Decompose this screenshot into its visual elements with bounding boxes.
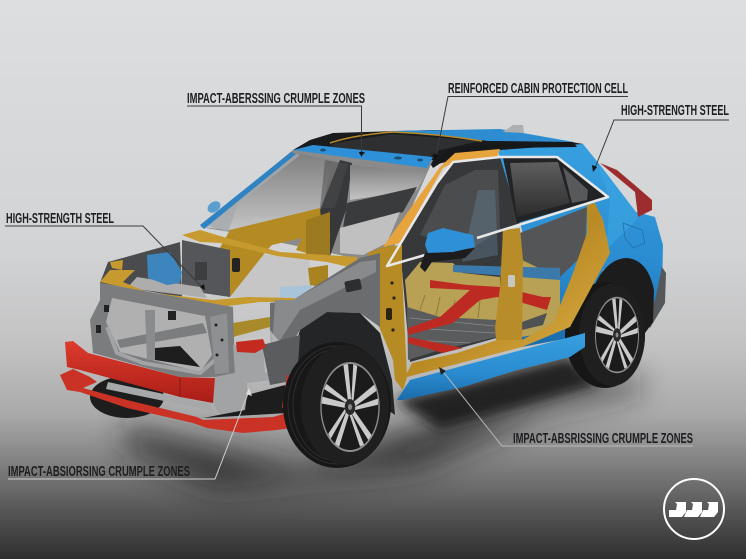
label: impact crumple zones bottom left xyxy=(8,388,252,480)
A pillar xyxy=(383,149,500,247)
front hinge pillar xyxy=(367,245,407,390)
panel: wheel arch structure xyxy=(270,253,395,415)
label: reinforced cabin: REINFORCED CABIN PROTECTION CELL xyxy=(448,81,628,97)
floor tan xyxy=(405,262,500,337)
window trim xyxy=(387,157,608,266)
label: impact crumple zones bottom right xyxy=(439,367,693,447)
red floor beams xyxy=(408,280,551,353)
panel: gold front beams xyxy=(100,230,358,307)
panel: front cabin opening xyxy=(385,157,520,362)
label: high-strength steel right xyxy=(592,103,729,172)
B pillar xyxy=(495,228,523,350)
panel: gold pillars and sill xyxy=(367,149,610,390)
label: impact crumple zones bottom left: IMPACT-ABSIORSING CRUMPLE ZONES xyxy=(8,464,190,480)
sill and rear pillar xyxy=(405,203,610,377)
panel: blue side sill xyxy=(397,333,585,400)
panel: red front crash beams xyxy=(60,341,305,433)
washer tank xyxy=(147,252,182,285)
blue A-pillar strip xyxy=(200,152,296,229)
floor grey xyxy=(407,307,497,360)
rear bumper xyxy=(646,267,666,328)
label: reinforced cabin xyxy=(433,81,628,160)
light view behind the firewall xyxy=(225,255,310,298)
panel: radiator support xyxy=(90,283,235,377)
ground shadow xyxy=(125,355,640,490)
logo badge xyxy=(664,479,724,539)
rear wheel xyxy=(565,282,645,388)
roof header beam xyxy=(293,145,433,168)
panel: windshield and interior glass xyxy=(200,145,433,267)
tail light xyxy=(600,163,652,217)
label: impact crumple zones top xyxy=(187,91,365,157)
rear wheel arch xyxy=(572,258,654,340)
far front tire xyxy=(90,376,164,418)
panel: engine bay xyxy=(100,240,230,298)
front wheel xyxy=(283,342,391,468)
front tower xyxy=(280,285,313,298)
roof xyxy=(293,125,585,168)
panel: rear door opening xyxy=(453,158,607,337)
panel: lower front structure xyxy=(106,330,300,418)
panel: firewall gold structure xyxy=(217,208,330,337)
label: high-strength steel left xyxy=(5,211,205,290)
car cutaway illustration xyxy=(60,125,666,468)
rear red inner piece xyxy=(236,339,266,353)
label: high-strength steel left: HIGH-STRENGTH STEEL xyxy=(6,211,114,227)
label: impact crumple zones top: IMPACT-ABERSSING CRUMPLE ZONES xyxy=(187,91,365,107)
side mirror xyxy=(420,228,475,272)
panel: rear blue body shell xyxy=(497,144,663,347)
antenna xyxy=(503,125,524,133)
